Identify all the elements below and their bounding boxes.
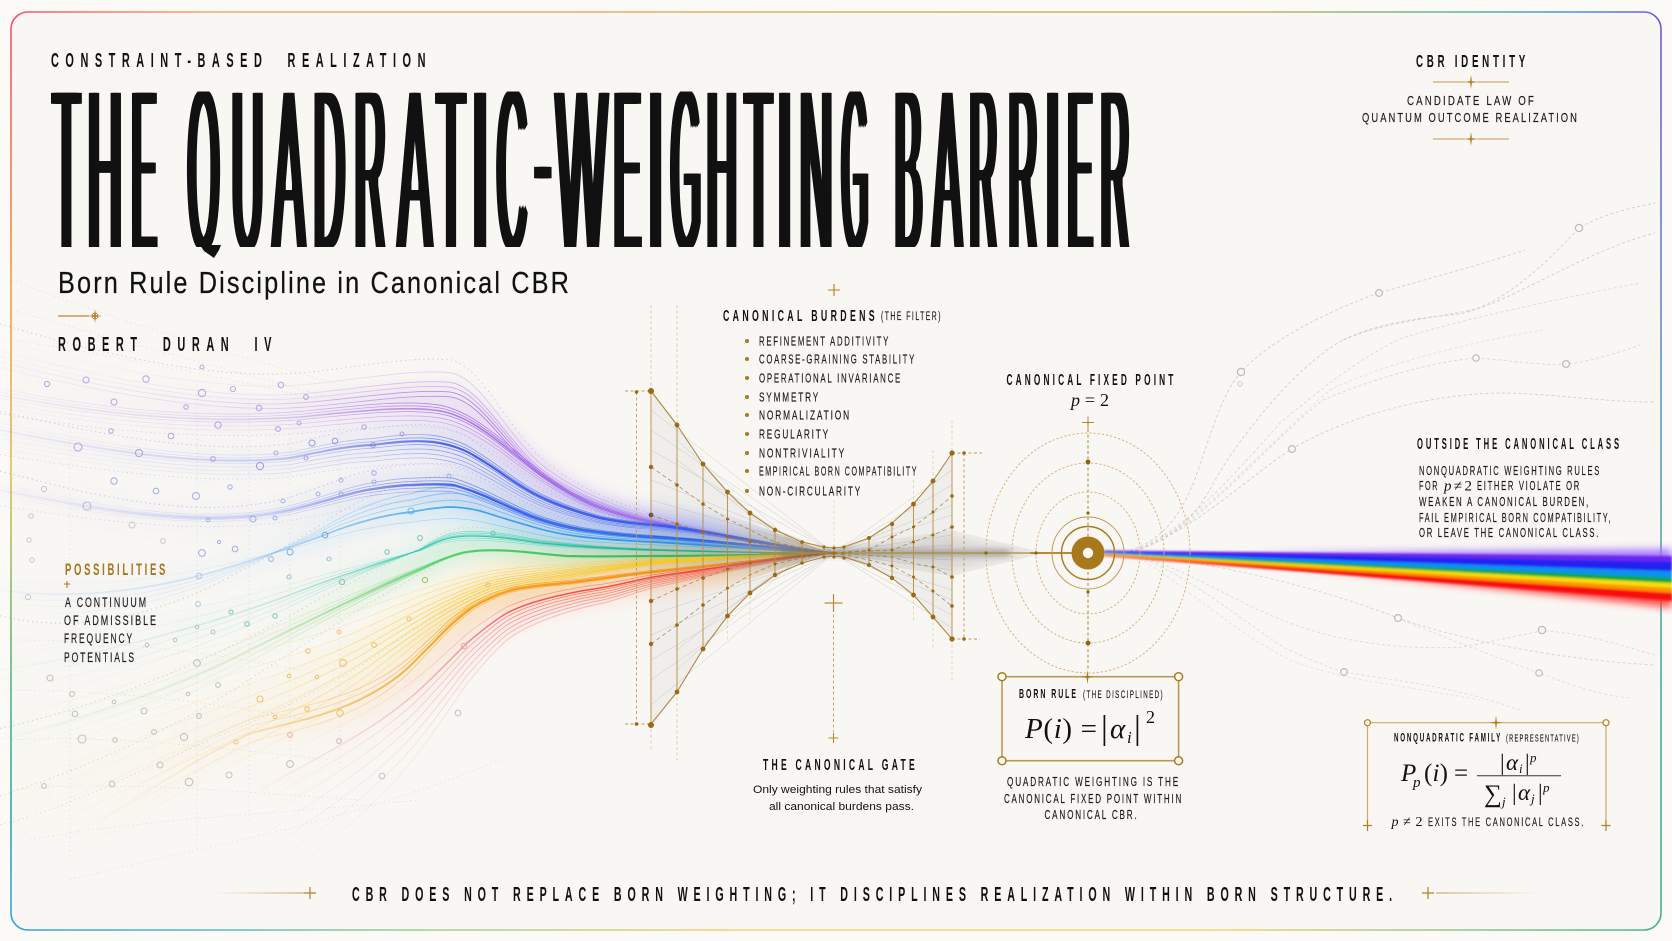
title: R xyxy=(970,38,997,301)
title: H xyxy=(707,38,737,301)
nonquadratic equation: = xyxy=(1454,760,1468,787)
title: A xyxy=(398,38,432,301)
panel: nonquadratic family box: (REPRESENTATIVE) xyxy=(1506,732,1580,744)
exit condition: p ≠ 2 xyxy=(1390,815,1422,830)
nonquadratic equation: p xyxy=(1529,750,1537,765)
burdens top marker xyxy=(828,284,840,296)
born rule equation xyxy=(1024,707,1155,747)
born rule equation: 2 xyxy=(1146,707,1155,727)
gate: lower axis with plus markers xyxy=(824,594,842,743)
title: R xyxy=(1009,38,1037,301)
possibilities flow: faint dotted lines xyxy=(0,324,833,825)
panel: the canonical gate caption: all canonical burdens pass. xyxy=(769,801,914,813)
possibilities flow: coloured wash xyxy=(208,383,825,741)
burden list: COARSE-GRAINING STABILITY xyxy=(759,352,916,366)
born rule caption xyxy=(1004,775,1183,822)
title: N xyxy=(800,38,832,301)
possibilities marker xyxy=(64,581,70,588)
burden list: NONTRIVIALITY xyxy=(759,446,846,460)
born rule caption: CANONICAL CBR. xyxy=(1044,808,1138,822)
nonquadratic equation: | xyxy=(1525,750,1530,775)
burden list: REGULARITY xyxy=(759,428,830,442)
born rule equation: i xyxy=(1127,728,1132,747)
nonquadratic equation: (i) xyxy=(1424,760,1448,787)
panel: CBR identity: CBR IDENTITY xyxy=(1416,51,1529,71)
panel: the canonical gate caption: THE CANONICAL GATE xyxy=(763,757,918,774)
panel: possibilities label: OF ADMISSIBLE xyxy=(64,613,158,628)
eyebrow: constraint-based realization: CONSTRAINT-BASED REALIZATION xyxy=(51,50,432,72)
title: - xyxy=(535,22,551,285)
panel: born rule formula box: (THE DISCIPLINED) xyxy=(1083,689,1164,701)
panel: possibilities label: FREQUENCY xyxy=(64,631,134,646)
burden list: REFINEMENT ADDITIVITY xyxy=(759,334,890,348)
panel: possibilities label xyxy=(64,560,168,665)
gate: vertical ribs xyxy=(651,391,952,724)
possibility dots: teal and green xyxy=(229,531,495,626)
title: I xyxy=(648,38,663,301)
title: I xyxy=(1045,38,1060,301)
exit condition xyxy=(1390,815,1585,830)
subtitle: Born Rule Discipline in Canonical CBR xyxy=(58,265,571,300)
nonquadratic equation: | xyxy=(1512,780,1517,805)
panel: the canonical gate caption xyxy=(753,757,923,813)
nonquadratic equation: p xyxy=(1542,780,1550,795)
panel: the canonical gate caption: Only weighting rules that satisfy xyxy=(753,784,923,796)
born rule equation: P(i) = xyxy=(1024,713,1097,745)
gate: node dots xyxy=(635,388,966,728)
panel: nonquadratic family box xyxy=(1363,716,1610,831)
label: canonical fixed point: p = 2 xyxy=(1069,390,1109,410)
panel: born rule formula box: BORN RULE xyxy=(1019,687,1078,701)
gate: dimension and extension lines xyxy=(625,305,982,760)
panel: outside the canonical class xyxy=(1417,436,1622,540)
title: I xyxy=(777,38,792,301)
panel: CBR identity: CANDIDATE LAW OF xyxy=(1407,93,1536,108)
panel: born rule formula box xyxy=(998,670,1183,765)
outer fan ring markers xyxy=(1237,224,1583,676)
panel: CBR identity xyxy=(1362,51,1579,146)
outer fan lines: upper excluded rules xyxy=(1130,203,1655,552)
panel: possibilities label: POSSIBILITIES xyxy=(65,560,168,579)
title: R xyxy=(1101,38,1129,301)
panel: canonical burdens: (THE FILTER) xyxy=(881,311,942,323)
title: A xyxy=(273,38,305,301)
title: T xyxy=(53,38,80,301)
panel: canonical burdens: CANONICAL BURDENS xyxy=(723,308,878,325)
title: R xyxy=(355,38,385,301)
nonquadratic equation: α xyxy=(1518,780,1531,805)
possibility dots: orange xyxy=(234,583,490,744)
label: canonical fixed point: CANONICAL FIXED POINT xyxy=(1006,372,1176,389)
born rule equation: | xyxy=(1101,710,1108,747)
panel: outside the canonical class: FOR xyxy=(1419,479,1439,493)
burden list xyxy=(759,334,918,498)
title: E xyxy=(614,38,641,301)
panel: nonquadratic family box: NONQUADRATIC FAMILY xyxy=(1394,732,1502,744)
burden list: SYMMETRY xyxy=(759,390,820,404)
panel: outside the canonical class: EITHER VIOLATE OR xyxy=(1477,479,1581,493)
title xyxy=(51,92,1130,247)
title: Q tail xyxy=(200,245,221,258)
nonquadratic equation: i xyxy=(1519,761,1523,776)
bottom statement ornaments xyxy=(213,887,1540,899)
burden list: NON-CIRCULARITY xyxy=(759,484,862,498)
possibilities flow: blue lines xyxy=(0,423,833,553)
outer fan lines: lower excluded rules xyxy=(1130,553,1655,710)
gate: dashed guide lines xyxy=(651,467,952,644)
burden list: OPERATIONAL INVARIANCE xyxy=(759,372,902,386)
possibilities flow: green and yellow lines xyxy=(0,550,833,879)
born rule caption: CANONICAL FIXED POINT WITHIN xyxy=(1004,792,1183,806)
canonical fixed point: axis xyxy=(1082,416,1094,670)
title: A xyxy=(933,38,961,301)
subtitle ornament xyxy=(58,309,102,323)
nonquadratic equation: | xyxy=(1500,750,1505,775)
title: B xyxy=(895,38,922,301)
nonquadratic equation: j xyxy=(1500,794,1506,809)
gate: funnel outline xyxy=(651,391,952,724)
title: T xyxy=(745,38,772,301)
possibility dots: violet xyxy=(41,365,404,510)
title: T xyxy=(437,38,465,301)
title: E xyxy=(1068,38,1092,301)
burden list: NORMALIZATION xyxy=(759,408,851,422)
title: U xyxy=(232,38,263,301)
faint background lines at far left xyxy=(12,280,500,880)
title: Q xyxy=(188,38,219,301)
nonquadratic equation: ∑ xyxy=(1484,781,1502,808)
box corner rings xyxy=(998,673,1183,765)
burden list: EMPIRICAL BORN COMPATIBILITY xyxy=(759,464,918,478)
title: C xyxy=(497,38,527,301)
rainbow beam: soft haze xyxy=(1250,549,1672,608)
possibility dots: neutral gray xyxy=(42,625,461,788)
nonquadratic equation: p xyxy=(1412,775,1421,791)
title: G xyxy=(842,38,868,301)
identity ornament bottom xyxy=(1433,132,1509,146)
panel: CBR identity: QUANTUM OUTCOME REALIZATION xyxy=(1362,110,1579,125)
born rule equation: α xyxy=(1110,713,1126,745)
burden bullets xyxy=(745,339,749,493)
title: I xyxy=(471,38,489,301)
canonical fixed point: rings and disc xyxy=(984,460,1124,645)
panel: canonical burdens xyxy=(723,284,942,498)
label: canonical fixed point xyxy=(1006,372,1176,410)
gate: converged dark beam to fixed point xyxy=(760,530,1072,576)
exit condition: EXITS THE CANONICAL CLASS. xyxy=(1428,815,1585,829)
author: ROBERT DURAN IV xyxy=(58,334,278,356)
possibilities flow: cyan and teal lines xyxy=(0,486,833,703)
gate: funnel fill behind the flows xyxy=(651,391,952,724)
nonquadratic equation: | xyxy=(1538,780,1543,805)
panel: outside the canonical class: p ≠ 2 xyxy=(1443,478,1472,494)
panel: possibilities label: A CONTINUUM xyxy=(65,595,148,610)
rainbow beam: output past fixed point xyxy=(1104,550,1672,601)
born rule caption: QUADRATIC WEIGHTING IS THE xyxy=(1007,775,1180,789)
title: D xyxy=(314,38,344,301)
open box frame xyxy=(1368,723,1606,822)
box corner markers xyxy=(1363,716,1610,831)
nonquadratic equation xyxy=(1400,750,1561,809)
title: H xyxy=(88,38,122,301)
identity ornament top xyxy=(1433,75,1509,89)
nonquadratic equation: α xyxy=(1506,750,1519,775)
possibilities flow: orange and red lines xyxy=(100,553,833,897)
title: G xyxy=(671,38,701,301)
nonquadratic equation: P xyxy=(1400,760,1416,787)
possibility dots: blue xyxy=(25,471,451,606)
title: E xyxy=(132,38,156,301)
gate: gray fan lines inside funnel xyxy=(651,410,952,705)
possibilities flow: violet lines xyxy=(0,339,833,553)
panel: possibilities label: POTENTIALS xyxy=(64,650,136,665)
canonical fixed point: dashed orbit ellipses xyxy=(986,433,1190,673)
title: W xyxy=(556,38,607,301)
born rule equation: | xyxy=(1134,710,1141,747)
nonquadratic equation: j xyxy=(1529,791,1535,806)
